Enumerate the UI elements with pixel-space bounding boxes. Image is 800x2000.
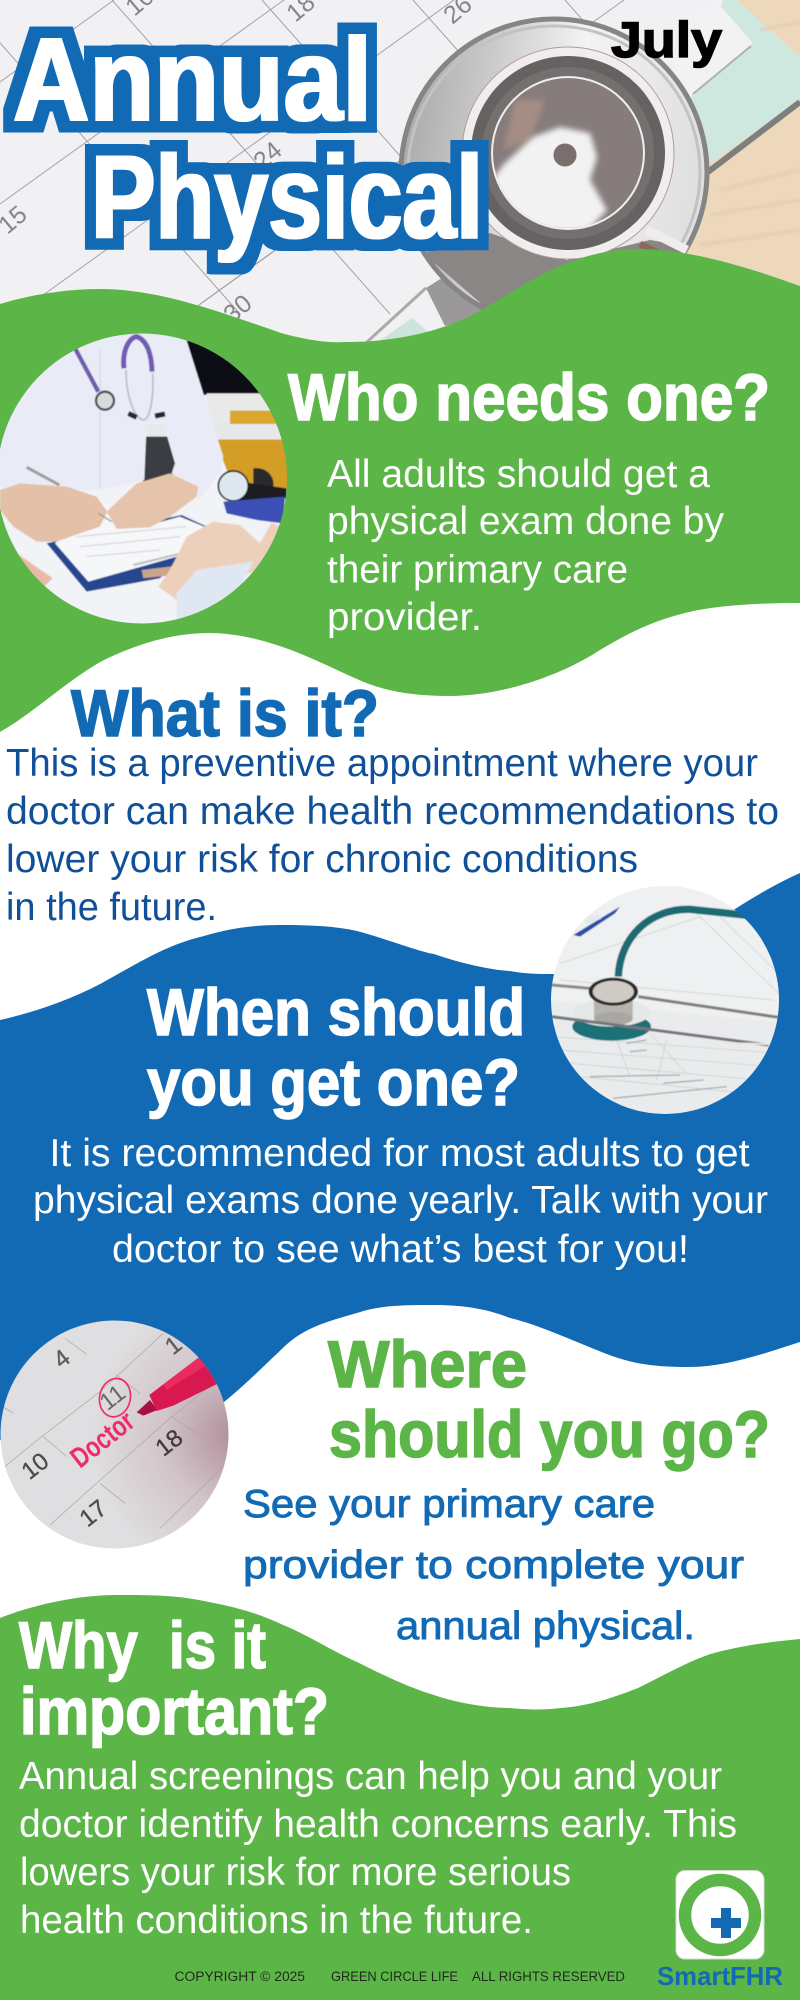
- footer: copyright line: COPYRIGHT © 2025: [174, 1969, 305, 1984]
- photo: calendar marked Doctor: 4: [48, 1344, 76, 1374]
- photo: stethoscope on a form: [551, 886, 779, 1114]
- photo: calendar marked Doctor: 18: [151, 1424, 188, 1462]
- photo: doctor writing at a desk: [0, 330, 300, 630]
- photo: calendar marked Doctor: 10: [17, 1448, 54, 1485]
- heading: Where should you go?: Where: [328, 1327, 527, 1401]
- text: who needs one body: their primary care: [327, 548, 628, 592]
- title: Annual Physical: Physical: [91, 131, 483, 264]
- text: where should you go body: See your primary care: [243, 1483, 655, 1526]
- text: why is it important body: health conditions in the future.: [20, 1899, 533, 1942]
- text: what is it body: lower your risk for chronic conditions: [6, 838, 638, 881]
- text: who needs one body: physical exam done by: [327, 500, 724, 543]
- text: what is it body: This is a preventive appointment where your: [6, 742, 758, 785]
- heading: Why is it important?: important?: [20, 1674, 329, 1748]
- heading: Where should you go?: [328, 1327, 770, 1471]
- photo: calendar marked Doctor: 17: [75, 1495, 112, 1533]
- panel: when should you get one (blue wave): [0, 873, 800, 1470]
- heading: Why is it important?: Why is it: [19, 1608, 266, 1682]
- heading: Why is it important?: [19, 1608, 329, 1748]
- text: who needs one body: provider.: [327, 596, 482, 639]
- heading: When should you get one?: [147, 975, 525, 1119]
- text: who needs one body: [327, 453, 724, 639]
- text: why is it important body: [19, 1755, 737, 1942]
- heading: When should you get one?: When should: [147, 975, 525, 1049]
- text: what is it body: doctor can make health recommendations to: [6, 790, 779, 833]
- text: when should you get one body: It is recommended for most adults to get: [50, 1132, 750, 1175]
- text: when should you get one body: doctor to see what’s best for you!: [112, 1228, 689, 1271]
- month label: July: July: [611, 12, 722, 68]
- footer: copyright line: ALL RIGHTS RESERVED: [472, 1969, 625, 1984]
- text: what is it body: in the future.: [6, 886, 217, 929]
- text: where should you go body: provider to complete your: [243, 1544, 744, 1587]
- photo: calendar marked Doctor: 11: [95, 1379, 131, 1416]
- text: why is it important body: doctor identify health concerns early. This: [19, 1803, 737, 1846]
- icon: SmartFHR logo: SmartFHR: [657, 1961, 783, 1991]
- stethoscope chest piece: [401, 19, 707, 330]
- title: Annual Physical: [13, 14, 483, 264]
- header photo: calendar and stethoscope: 24: [248, 136, 288, 176]
- text: who needs one body: All adults should get a: [327, 453, 710, 496]
- panel: why is it important (green wave): [0, 1595, 800, 2000]
- text: where should you go body: annual physical.: [396, 1605, 695, 1648]
- heading: When should you get one?: you get one?: [147, 1045, 520, 1119]
- header photo: calendar and stethoscope: 30: [218, 289, 258, 329]
- heading: What is it?: What is it?: [71, 676, 379, 750]
- photo: calendar marked Doctor: Doctor: [65, 1405, 141, 1475]
- photo: calendar marked Doctor: 1: [160, 1331, 187, 1360]
- icon: SmartFHR logo: [657, 1870, 783, 1991]
- text: why is it important body: lowers your risk for more serious: [20, 1851, 571, 1894]
- title: Annual Physical: Annual: [13, 14, 372, 146]
- text: what is it body: [6, 742, 779, 929]
- text: when should you get one body: physical exams done yearly. Talk with your: [33, 1179, 768, 1222]
- header photo: calendar and stethoscope: [0, 0, 800, 342]
- photo: calendar marked Doctor: [0, 1315, 240, 1555]
- footer: copyright line: GREEN CIRCLE LIFE: [331, 1969, 458, 1984]
- panel: who needs one (green wave): [0, 249, 800, 732]
- text: when should you get one body: [33, 1132, 768, 1271]
- footer: copyright line: [174, 1969, 625, 1984]
- text: where should you go body: [243, 1483, 744, 1648]
- text: why is it important body: Annual screenings can help you and your: [19, 1755, 722, 1798]
